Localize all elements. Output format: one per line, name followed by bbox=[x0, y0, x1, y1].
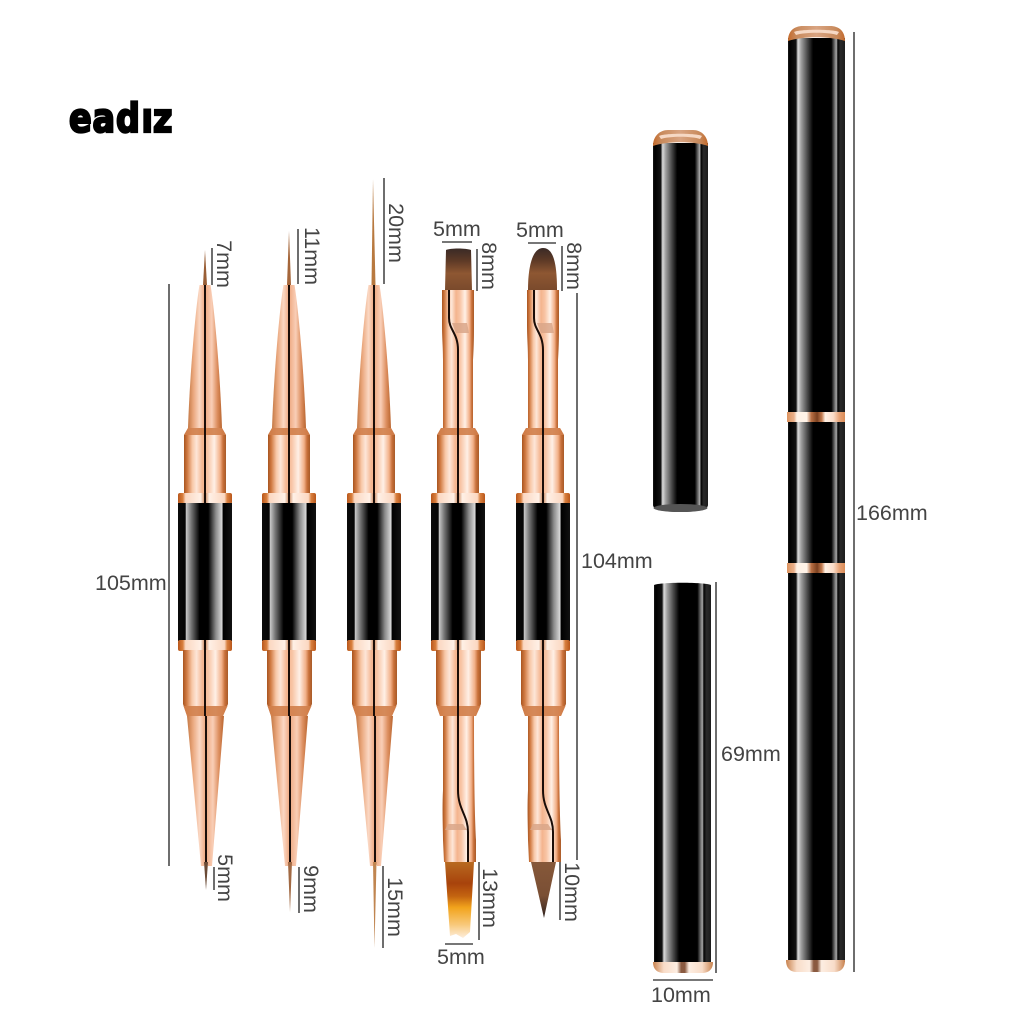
cap opening bbox=[654, 504, 708, 512]
upper hair bbox=[203, 250, 207, 285]
pen top cap bbox=[788, 26, 845, 41]
dimension: 7mm: 7mm bbox=[212, 240, 236, 288]
upper tip bbox=[272, 285, 306, 428]
tube lower section bbox=[653, 583, 713, 973]
cap top bbox=[653, 130, 708, 146]
dimension: ombre brush 5mm: 5mm bbox=[437, 945, 485, 969]
dimension: 105mm: 105mm bbox=[95, 571, 167, 595]
tube base bbox=[653, 962, 713, 973]
dimension: tube 10mm: 10mm bbox=[651, 983, 711, 1007]
handle bbox=[347, 428, 401, 716]
dimension: flat brush 8mm: 8mm bbox=[477, 242, 501, 290]
brush 1: 7mm / 5mm liner bbox=[178, 250, 232, 890]
cap tube bbox=[653, 143, 708, 512]
handle bbox=[262, 428, 316, 716]
brush 4: flat and ombre bbox=[431, 248, 485, 938]
dimension: pointed 10mm: 10mm bbox=[560, 862, 584, 922]
short cap bbox=[653, 130, 708, 512]
pointed bristles bbox=[531, 862, 556, 918]
dimension: 166mm: 166mm bbox=[856, 501, 928, 525]
pen base bbox=[786, 960, 845, 972]
dimension: lower 5mm: 5mm bbox=[213, 854, 237, 902]
brush 2: 11mm / 9mm liner bbox=[262, 231, 316, 912]
lower hair bbox=[373, 862, 376, 948]
upper hair bbox=[372, 179, 376, 285]
handle bbox=[178, 428, 232, 716]
pen body bbox=[788, 38, 845, 962]
long assembled pen bbox=[786, 26, 845, 972]
oval bristles bbox=[528, 248, 557, 290]
logo: eadiz: eadiz bbox=[69, 95, 172, 142]
dimension: 15mm: 15mm bbox=[383, 877, 407, 937]
upper tip bbox=[188, 285, 222, 428]
upper band bbox=[787, 412, 845, 422]
handle bbox=[431, 428, 485, 716]
brush 5: oval and pointed bbox=[516, 248, 570, 918]
dimension: 11mm: 11mm bbox=[300, 227, 324, 285]
dimension: 20mm: 20mm bbox=[384, 203, 408, 263]
dimension: oval brush 5mm: 5mm bbox=[516, 218, 564, 242]
upper neck bbox=[527, 290, 559, 430]
dimension: 104mm: 104mm bbox=[581, 549, 653, 573]
handle bbox=[516, 428, 570, 716]
upper tip bbox=[357, 285, 391, 428]
dimension: 20mm bbox=[384, 178, 408, 284]
lower band bbox=[787, 563, 845, 573]
upper hair bbox=[287, 231, 291, 285]
lower tip bbox=[271, 716, 308, 866]
lower hair bbox=[204, 862, 208, 890]
dimension: flat brush 5mm: 5mm bbox=[433, 217, 481, 241]
brush 3: 20mm / 15mm liner bbox=[347, 179, 401, 948]
ombre bristles bbox=[445, 862, 474, 938]
dimension: 9mm: 9mm bbox=[299, 865, 323, 913]
dimension: 13mm: 13mm bbox=[478, 868, 502, 928]
lower hair bbox=[288, 862, 292, 912]
dimension: oval brush 8mm: 8mm bbox=[562, 242, 586, 290]
tube body bbox=[654, 583, 711, 964]
dimension: 69mm: 69mm bbox=[721, 742, 781, 766]
upper neck bbox=[442, 290, 474, 430]
lower neck bbox=[528, 716, 561, 862]
lower tip bbox=[187, 716, 224, 866]
lower tip bbox=[356, 716, 393, 866]
lower neck bbox=[443, 716, 476, 862]
flat bristles bbox=[445, 248, 472, 290]
